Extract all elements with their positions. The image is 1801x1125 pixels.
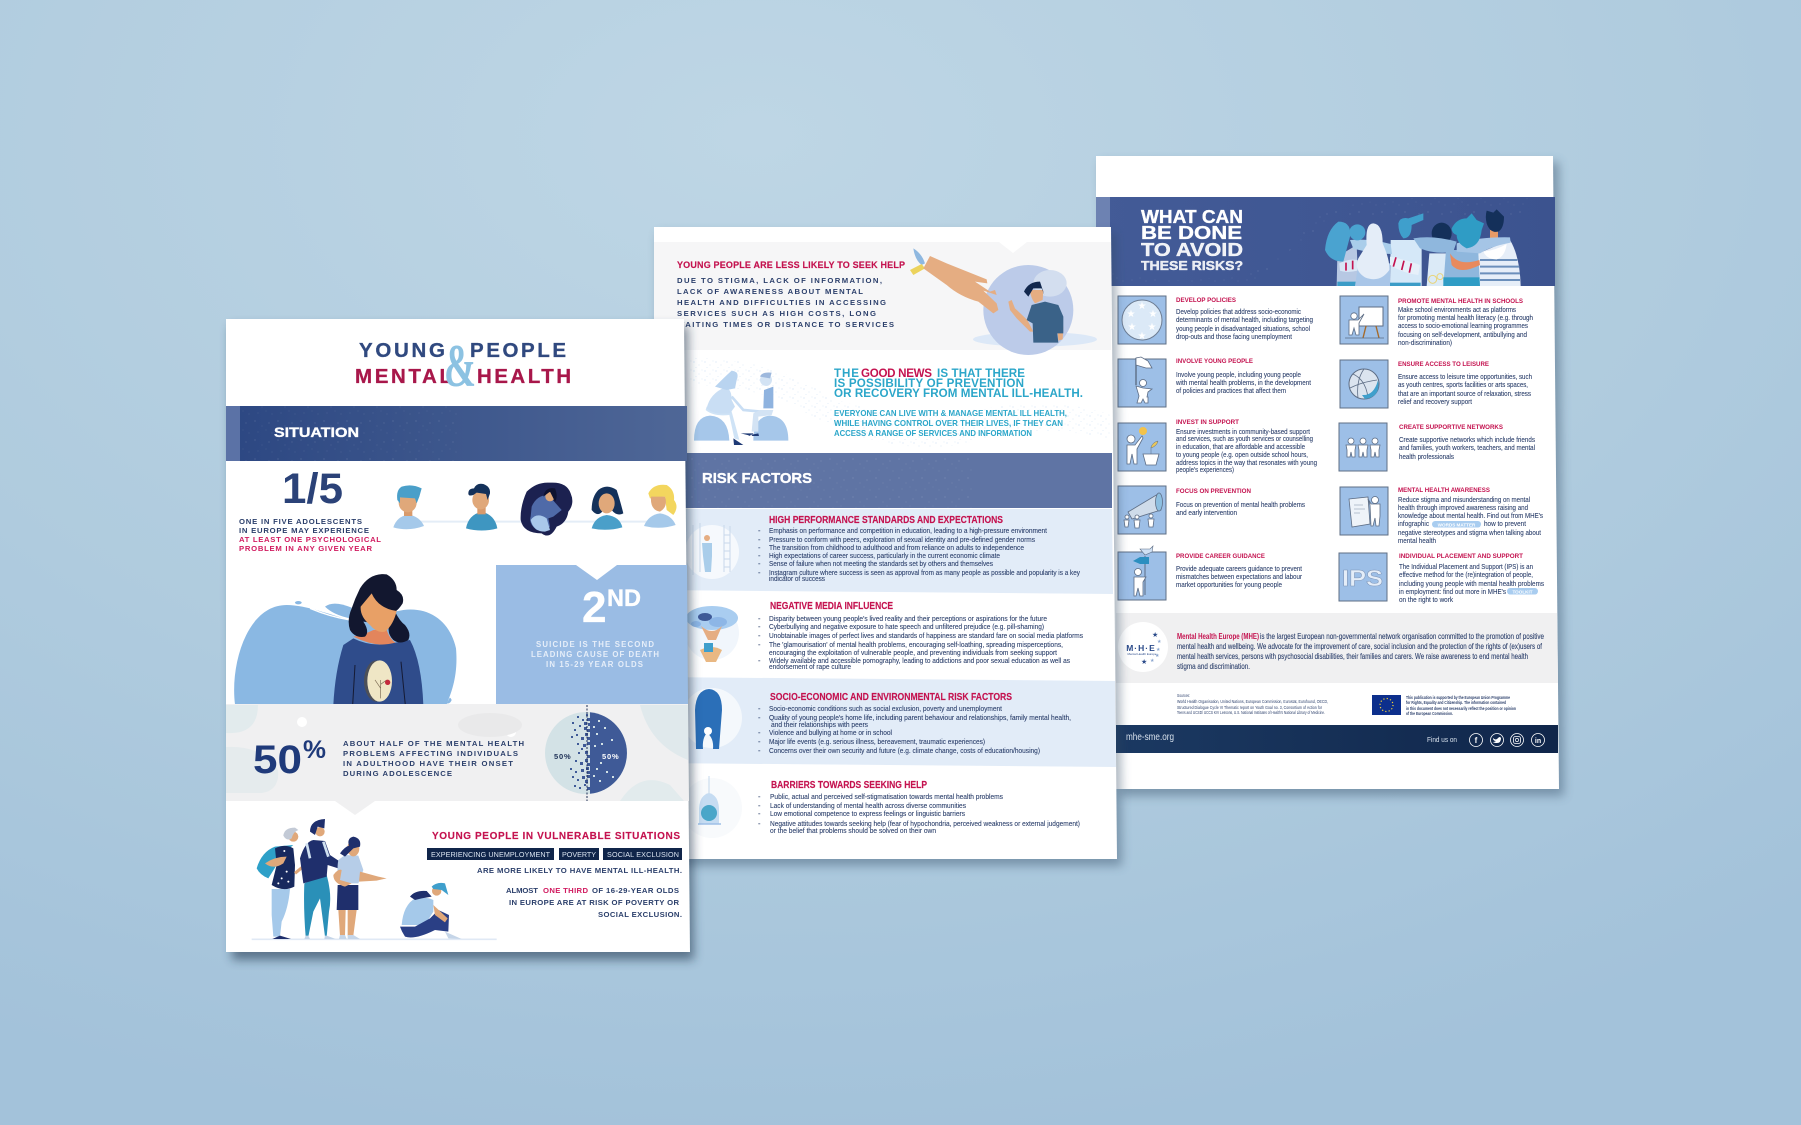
illustration: group of friends from behind xyxy=(1325,209,1521,286)
item: provide career guidance: Provide adequate careers guidance to prevent xyxy=(1176,564,1303,573)
help text: HEALTH AND DIFFICULTIES IN ACCESSING xyxy=(677,298,886,307)
help text xyxy=(677,276,894,329)
logo: MHE: ★ xyxy=(1155,653,1160,659)
icon: person with speech bubbles xyxy=(685,606,739,662)
bullet list: endorsement of rape culture xyxy=(769,662,851,671)
tags xyxy=(427,848,682,860)
item: focus on prevention: and early intervention xyxy=(1176,508,1237,517)
item: invest in support: INVEST IN SUPPORT xyxy=(1176,419,1240,426)
bullet list: The transition from childhood to adulthood and from reliance on adults to independence xyxy=(769,543,1024,552)
bullet list: Socio-economic conditions such as social exclusion, poverty and unemployment xyxy=(769,704,1003,713)
vulnerable text: ALMOST xyxy=(506,886,538,895)
item: individual placement and support: on the right to work xyxy=(1399,595,1453,604)
item: mental health awareness: MENTAL HEALTH AWARENESS xyxy=(1398,487,1490,494)
section: high performance: HIGH PERFORMANCE STANDARDS AND EXPECTATIONS xyxy=(769,515,1003,526)
bullet list: - xyxy=(758,543,761,552)
EU flag and funding note xyxy=(1372,695,1516,716)
subtext: living with mental ill-health xyxy=(834,409,1067,438)
item: involve young people xyxy=(1118,357,1312,407)
avatar 4 xyxy=(592,487,623,530)
item: involve young people: of policies and practices that affect them xyxy=(1176,386,1286,395)
avatar 3: person curled up in dark cloud xyxy=(521,483,572,536)
help text: WAITING TIMES OR DISTANCE TO SERVICES xyxy=(677,320,894,329)
panel: page 2, seeking help and risk factors xyxy=(654,227,1122,866)
item: provide career guidance: market opportunities for young people xyxy=(1176,580,1282,589)
tags: SOCIAL EXCLUSION xyxy=(607,850,679,859)
panel: fifty percent xyxy=(226,704,689,815)
person with backpack xyxy=(257,828,315,939)
vulnerable text: SOCIAL EXCLUSION. xyxy=(598,910,682,919)
item: individual placement and support: INDIVIDUAL PLACEMENT AND SUPPORT xyxy=(1399,553,1524,560)
item: mental health awareness: infographic xyxy=(1398,519,1429,528)
bullet list: - xyxy=(758,704,761,713)
item: provide career guidance: PROVIDE CAREER GUIDANCE xyxy=(1176,553,1265,560)
panel: fifty percent: % xyxy=(303,736,326,764)
bullet list: encouraging the exploitation of vulnerable people, and preventing individuals from seeking support xyxy=(769,648,1058,657)
person sitting alone xyxy=(400,883,462,939)
panel: about Mental Health Europe xyxy=(1116,613,1558,683)
icon: brain under bell jar xyxy=(682,776,742,838)
bullet list: - xyxy=(758,631,761,640)
help text: SERVICES SUCH AS HIGH COSTS, LONG xyxy=(677,309,876,318)
bullet list xyxy=(758,704,1071,755)
about text: mental health and wellbeing. We advocate for the improvement of care, social inclusion and the protection of the rights of (ex)users of xyxy=(1177,642,1543,651)
banner: risk factors xyxy=(654,453,1112,508)
item: individual placement and support: effective method for the (re)integration of people, xyxy=(1399,570,1533,579)
item: ensure access to leisure: that are an important source of relaxation, stress xyxy=(1398,389,1531,398)
bullet list: High expectations of career success, particularly in the current economic climate xyxy=(769,551,1000,560)
headline: good news: THE xyxy=(834,367,859,380)
bullet list: Pressure to conform with peers, exploration of sexual identity and pre-defined gender norms xyxy=(769,535,1035,544)
section: less likely to seek help: YOUNG PEOPLE ARE LESS LIKELY TO SEEK HELP xyxy=(677,260,905,270)
stat: one in five xyxy=(239,465,381,553)
bullet list: - xyxy=(758,737,761,746)
item: focus on prevention xyxy=(1118,486,1305,534)
icon: twitter xyxy=(1490,734,1504,746)
item: create supportive networks: and families, youth workers, teachers, and mental xyxy=(1399,443,1535,452)
logo: MHE: ★ xyxy=(1150,658,1155,664)
icon: instagram xyxy=(1510,734,1524,746)
person in teal trousers xyxy=(300,819,345,939)
icon: EU stars circle: ★ xyxy=(1127,309,1136,320)
item: develop policies: DEVELOP POLICIES xyxy=(1176,297,1236,304)
logo: MHE: ★ xyxy=(1156,647,1161,653)
bullet list: indicator of success xyxy=(769,574,825,583)
panel: second leading cause: ND xyxy=(607,585,641,612)
logo: MHE xyxy=(1118,622,1168,672)
about text: Mental Health Europe (MHE) xyxy=(1177,632,1259,641)
item: promote mental health in schools: PROMOTE MENTAL HEALTH IN SCHOOLS xyxy=(1398,298,1523,305)
bullet list: - xyxy=(758,622,761,631)
stat: one in five: 1/5 xyxy=(282,465,343,513)
icon: IPS letters xyxy=(1339,553,1387,601)
icon: three people holding hands xyxy=(1339,423,1387,471)
bullet list: - xyxy=(758,614,761,623)
person pointing xyxy=(333,837,387,939)
EU flag and funding note: in this document does not necessarily reflect the position or opinion xyxy=(1406,706,1516,711)
title: YOUNG xyxy=(359,339,445,362)
bullet list: Public, actual and perceived self-stigmatisation towards mental health problems xyxy=(770,792,1003,801)
chart: half dissolving circle: 50% xyxy=(602,752,619,761)
vulnerable text: IN EUROPE ARE AT RISK OF POVERTY OR xyxy=(509,898,679,907)
button: words matter: WORDS MATTER xyxy=(1438,522,1476,527)
panel: page 3, what can be done xyxy=(1096,156,1564,796)
bullet list: - xyxy=(758,656,761,665)
section: less likely to seek help xyxy=(654,242,1111,355)
icon: megaphone with people xyxy=(1118,486,1166,534)
sources: Structured Dialogue Cycle VI Thematic report on Youth Goal no. 3, Consortium of Action for xyxy=(1177,705,1323,710)
item: invest in support: in education, that are affordable and accessible xyxy=(1176,442,1305,451)
icon: person with document xyxy=(1340,487,1388,535)
logo: MHE: Mental Health Europe xyxy=(1127,652,1157,656)
bullet list: - xyxy=(758,801,761,810)
item: provide career guidance: mismatches between expectations and labour xyxy=(1176,572,1302,581)
icon: EU stars circle: ★ xyxy=(1138,301,1147,312)
icon: person watering plant xyxy=(1118,423,1166,471)
item: promote mental health in schools: for promoting mental health literacy (e.g. through xyxy=(1398,313,1533,322)
icon: IPS letters: IPS xyxy=(1342,565,1383,591)
icon: EU stars circle: ★ xyxy=(1149,309,1158,320)
banner: what can be done xyxy=(1096,197,1555,286)
icon: basketball xyxy=(1340,360,1388,408)
icon: facebook xyxy=(1470,734,1482,746)
bullet list: - xyxy=(758,526,761,535)
bullet list: - xyxy=(758,535,761,544)
fifty percent text: IN ADULTHOOD HAVE THEIR ONSET xyxy=(343,759,513,768)
item: mental health awareness: negative stereotypes and stigma when talking about xyxy=(1398,528,1542,537)
stat: one in five: PROBLEM IN ANY GIVEN YEAR xyxy=(239,544,372,553)
illustration: reaching hand and person in bubble xyxy=(910,248,1097,355)
bullet list: - xyxy=(758,792,761,801)
icon: adult shadow over child xyxy=(682,688,742,749)
section: vulnerable situations xyxy=(252,819,682,939)
sources: Sources: xyxy=(1177,693,1190,698)
bullet list: - xyxy=(758,713,761,722)
illustration: friends comforting person sitting alone xyxy=(252,819,497,939)
footer bar xyxy=(1116,725,1558,753)
stat: one in five: IN EUROPE MAY EXPERIENCE xyxy=(239,526,369,535)
item: develop policies: young people in disadvantaged situations, school xyxy=(1176,324,1310,333)
vulnerable text: ARE MORE LIKELY TO HAVE MENTAL ILL-HEALTH. xyxy=(477,866,682,875)
item: ensure access to leisure: relief and recovery support xyxy=(1398,397,1473,406)
banner title: BE DONE xyxy=(1141,223,1242,243)
headline: good news: IS POSSIBILITY OF PREVENTION xyxy=(834,377,1024,390)
section: negative media influence: NEGATIVE MEDIA INFLUENCE xyxy=(770,601,893,612)
section: barriers to seeking help: BARRIERS TOWARDS SEEKING HELP xyxy=(771,780,927,791)
item: provide career guidance xyxy=(1118,546,1303,600)
logo: MHE: ★ xyxy=(1152,631,1158,639)
item: invest in support: Ensure investments in community-based support xyxy=(1176,427,1311,436)
section: vulnerable situations: YOUNG PEOPLE IN VULNERABLE SITUATIONS xyxy=(432,831,680,842)
bullet list: - xyxy=(758,640,761,649)
bullet list: Concerns over their own security and future (e.g. climate change, costs of education/housing) xyxy=(769,746,1040,755)
item: involve young people: INVOLVE YOUNG PEOPLE xyxy=(1176,358,1253,365)
panel: second leading cause: SUICIDE IS THE SECOND xyxy=(536,640,654,649)
panel: second leading cause: IN 15-29 YEAR OLDS xyxy=(546,660,643,669)
fifty percent text: PROBLEMS AFFECTING INDIVIDUALS xyxy=(343,749,518,758)
item: individual placement and support: in employment: find out more in MHE's xyxy=(1399,587,1506,596)
bullet list: - xyxy=(758,551,761,560)
title: MENTAL xyxy=(355,365,452,388)
icon: EU stars circle: ★ xyxy=(1148,322,1157,333)
item: develop policies: Develop policies that address socio-economic xyxy=(1176,307,1301,316)
item: individual placement and support: including young people with mental health problems xyxy=(1399,579,1544,588)
bullet list: - xyxy=(758,819,761,828)
panel: second leading cause: LEADING CAUSE OF DEATH xyxy=(531,650,659,659)
fifty percent text: DURING ADOLESCENCE xyxy=(343,769,452,778)
banner: situation xyxy=(226,406,687,461)
about text: mental health services, persons with psychosocial disabilities, their families and carers. We raise awareness to end mental health xyxy=(1177,652,1528,661)
banner title: WHAT CAN xyxy=(1141,207,1243,227)
banner title: THESE RISKS? xyxy=(1141,258,1243,273)
tags: EXPERIENCING UNEMPLOYMENT xyxy=(431,850,551,859)
bullet list: Low emotional competence to express feelings or linguistic barriers xyxy=(770,809,965,818)
title: & xyxy=(444,333,476,399)
bullet list: The 'glamourisation' of mental health problems, encouraging self-loathing, spreading misperceptions, xyxy=(769,640,1063,649)
bullet list: Negative attitudes towards seeking help (fear of hypochondria, perceived weakness or external judgement) xyxy=(770,819,1080,828)
item: develop policies xyxy=(1118,296,1313,344)
item: mental health awareness: health through improved awareness raising and xyxy=(1398,503,1528,512)
subtext: living with mental ill-health: ACCESS A RANGE OF SERVICES AND INFORMATION xyxy=(834,429,1032,438)
bullet list: Major life events (e.g. serious illness, bereavement, traumatic experiences) xyxy=(769,737,985,746)
EU flag and funding note: for Rights, Equality and Citizenship. The information contained xyxy=(1406,700,1506,705)
logo: MHE: ★ xyxy=(1141,658,1147,666)
bullet list: Emphasis on performance and competition in education, leading to a high-pressure environment xyxy=(769,526,1048,535)
bullet list: Instagram culture where success is seen as approval from as many people as possible and popularity is a key xyxy=(769,568,1080,577)
about text: stigma and discrimination. xyxy=(1177,662,1250,671)
item: promote mental health in schools: Make school environments act as platforms xyxy=(1398,305,1516,314)
avatar 1 xyxy=(393,485,424,529)
bullet list: Lack of understanding of mental health across diverse communities xyxy=(770,801,966,810)
bullet list: Quality of young people's home life, including parent behaviour and relationships, family mental health, xyxy=(769,713,1071,722)
title xyxy=(355,333,571,399)
avatar 2 xyxy=(466,484,497,530)
footer bar: Find us on xyxy=(1427,735,1457,744)
sources: Teens and UCSD/ UCCS KIV Lessons, U.S. National Institutes of Health's National Library of Medicine. xyxy=(1177,710,1325,715)
title: PEOPLE xyxy=(470,339,566,362)
item: promote mental health in schools: access to socio-emotional learning programmes xyxy=(1398,321,1528,330)
help text: DUE TO STIGMA, LACK OF INFORMATION, xyxy=(677,276,882,285)
section: negative media influence xyxy=(685,601,1083,671)
icon: EU stars circle: ★ xyxy=(1128,322,1137,333)
bullet list: or the belief that problems should be solved on their own xyxy=(770,826,936,835)
illustration: two people talking on seats xyxy=(694,371,788,445)
item: involve young people: Involve young people, including young people xyxy=(1176,370,1301,379)
icon: facebook: f xyxy=(1475,736,1478,745)
panel: second leading cause: 2 xyxy=(582,583,606,632)
item: mental health awareness: knowledge about mental health. Find out from MHE's xyxy=(1398,511,1543,520)
fifty percent text: ABOUT HALF OF THE MENTAL HEALTH xyxy=(343,739,524,748)
banner title xyxy=(1141,207,1243,273)
item: invest in support: people's experiences) xyxy=(1176,465,1234,474)
item: mental health awareness: Reduce stigma and misunderstanding on mental xyxy=(1398,495,1530,504)
stat: one in five: AT LEAST ONE PSYCHOLOGICAL xyxy=(239,535,381,544)
logo: MHE: M·H·E xyxy=(1126,643,1156,653)
sources xyxy=(1177,693,1328,715)
about text: is the largest European non-governmental network organisation committed to the promotion of positive xyxy=(1260,632,1544,641)
item: focus on prevention: FOCUS ON PREVENTION xyxy=(1176,488,1251,495)
footer bar: mhe-sme.org xyxy=(1126,732,1174,743)
EU flag and funding note: This publication is supported by the European Union Programme xyxy=(1406,695,1511,700)
item: ensure access to leisure: ENSURE ACCESS TO LEISURE xyxy=(1398,361,1489,368)
item: promote mental health in schools: non-discrimination) xyxy=(1398,338,1452,347)
bullet list: Violence and bullying at home or in school xyxy=(769,728,892,737)
bullet list: - xyxy=(758,809,761,818)
item: create supportive networks: health professionals xyxy=(1399,452,1454,461)
button: toolkit: TOOLKIT xyxy=(1512,589,1533,594)
section: high performance xyxy=(654,509,1113,594)
item: develop policies: determinants of mental health, including targeting xyxy=(1176,315,1313,324)
banner: situation: SITUATION xyxy=(274,424,359,440)
subtext: living with mental ill-health: EVERYONE CAN LIVE WITH & MANAGE MENTAL ILL HEALTH, xyxy=(834,409,1067,418)
vulnerable text xyxy=(477,866,682,919)
button: words matter xyxy=(1432,521,1481,528)
bullet list xyxy=(758,526,1080,583)
headline: good news: OR RECOVERY FROM MENTAL ILL-HEALTH. xyxy=(834,387,1083,400)
tags: POVERTY xyxy=(562,850,596,859)
item: create supportive networks xyxy=(1339,423,1535,471)
subtext: living with mental ill-health: WHILE HAVING CONTROL OVER THEIR LIVES, IF THEY CAN xyxy=(834,419,1063,428)
item: invest in support: address topics in the way that resonates with young xyxy=(1176,458,1317,467)
panel: second leading cause xyxy=(496,565,688,704)
icon: teacher and whiteboard xyxy=(1340,296,1388,344)
icon: person with flag xyxy=(1118,357,1166,407)
item: develop policies: drop-outs and those facing unemployment xyxy=(1176,332,1293,341)
item: individual placement and support: The Individual Placement and Support (IPS) is an xyxy=(1399,562,1533,571)
item: ensure access to leisure xyxy=(1340,360,1532,408)
item: invest in support: to young people (e.g. open outside school hours, xyxy=(1176,450,1308,459)
panel: fifty percent: 50 xyxy=(253,738,302,782)
section: barriers to seeking help xyxy=(682,776,1080,838)
item: create supportive networks: CREATE SUPPORTIVE NETWORKS xyxy=(1399,424,1503,431)
icon: EU stars circle: ★ xyxy=(1138,331,1147,342)
logo: MHE: ★ xyxy=(1157,639,1162,645)
bullet list: Cyberbullying and negative exposure to hate speech and unfiltered prejudice (e.g. pill-shaming) xyxy=(769,622,1044,631)
section: good news xyxy=(690,358,1110,447)
item: mental health awareness: mental health xyxy=(1398,536,1436,545)
bullet list xyxy=(758,614,1083,671)
section: socio-economic factors xyxy=(654,677,1116,767)
icon: linkedin: in xyxy=(1535,738,1541,745)
vulnerable text: ONE THIRD xyxy=(543,886,588,895)
bullet list: Disparity between young people's lived reality and their perceptions or aspirations for the future xyxy=(769,614,1047,623)
item: promote mental health in schools: focusing on self-development, antibullying and xyxy=(1398,330,1527,339)
bullet list: - xyxy=(758,746,761,755)
headline: good news xyxy=(834,367,1083,400)
avatar 5 xyxy=(644,485,677,528)
headline: good news: IS THAT THERE xyxy=(937,367,1025,380)
bullet list: - xyxy=(758,728,761,737)
panel: page 1, situation xyxy=(226,319,694,960)
item: mental health awareness: how to prevent xyxy=(1484,519,1527,528)
illustration: woman with heart tree on sweater xyxy=(234,574,456,705)
icon: linkedin xyxy=(1532,734,1544,746)
bullet list xyxy=(758,792,1080,835)
icon: person on ladder wall xyxy=(685,523,739,579)
about text xyxy=(1177,632,1544,671)
title: HEALTH xyxy=(477,365,571,388)
item: individual placement and support xyxy=(1339,553,1544,604)
item: involve young people: with mental health problems, in the development xyxy=(1175,378,1312,387)
item: invest in support: and services, such as youth services or counselling xyxy=(1176,434,1313,443)
illustration: row of five adolescents xyxy=(393,483,677,536)
chart: half dissolving circle xyxy=(545,705,627,801)
item: promote mental health in schools xyxy=(1340,296,1533,347)
vulnerable text: OF 16-29-YEAR OLDS xyxy=(592,886,679,895)
icon: EU stars circle xyxy=(1118,296,1166,344)
item: ensure access to leisure: as youth centres, sports facilities or arts spaces, xyxy=(1398,380,1528,389)
stat: one in five: ONE IN FIVE ADOLESCENTS xyxy=(239,517,362,526)
icon: person with signpost xyxy=(1118,546,1166,600)
chart: half dissolving circle: 50% xyxy=(554,752,571,761)
button: toolkit xyxy=(1507,588,1538,594)
item: focus on prevention: Focus on prevention of mental health problems xyxy=(1176,500,1305,509)
banner title: TO AVOID xyxy=(1141,240,1243,260)
bullet list: Sense of failure when not meeting the standards set by others and themselves xyxy=(769,559,993,568)
headline: good news: GOOD NEWS xyxy=(861,367,932,380)
sources: World Health Organisation, United Nations, European Commission, Eurostat, Eurofound, OECD, xyxy=(1177,699,1328,704)
bullet list: Widely available and accessible pornography, leading to addictions and poor sexual education as well as xyxy=(769,656,1070,665)
EU flag and funding note: of the European Commission. xyxy=(1406,711,1453,716)
section: socio-economic factors: SOCIO-ECONOMIC AND ENVIRONMENTAL RISK FACTORS xyxy=(770,692,1012,703)
item: create supportive networks: Create supportive networks which include friends xyxy=(1399,435,1535,444)
help text: LACK OF AWARENESS ABOUT MENTAL xyxy=(677,287,863,296)
bullet list: - xyxy=(758,559,761,568)
bullet list: and their relationships with peers xyxy=(771,720,868,729)
item: mental health awareness xyxy=(1340,487,1543,545)
bullet list: - xyxy=(758,568,761,577)
item: invest in support xyxy=(1118,419,1317,474)
banner: risk factors: RISK FACTORS xyxy=(702,471,812,487)
fifty percent text xyxy=(343,739,524,778)
item: ensure access to leisure: Ensure access to leisure time opportunities, such xyxy=(1398,372,1532,381)
bullet list: Unobtainable images of perfect lives and standards of happiness are standard fare on social media platforms xyxy=(769,631,1083,640)
